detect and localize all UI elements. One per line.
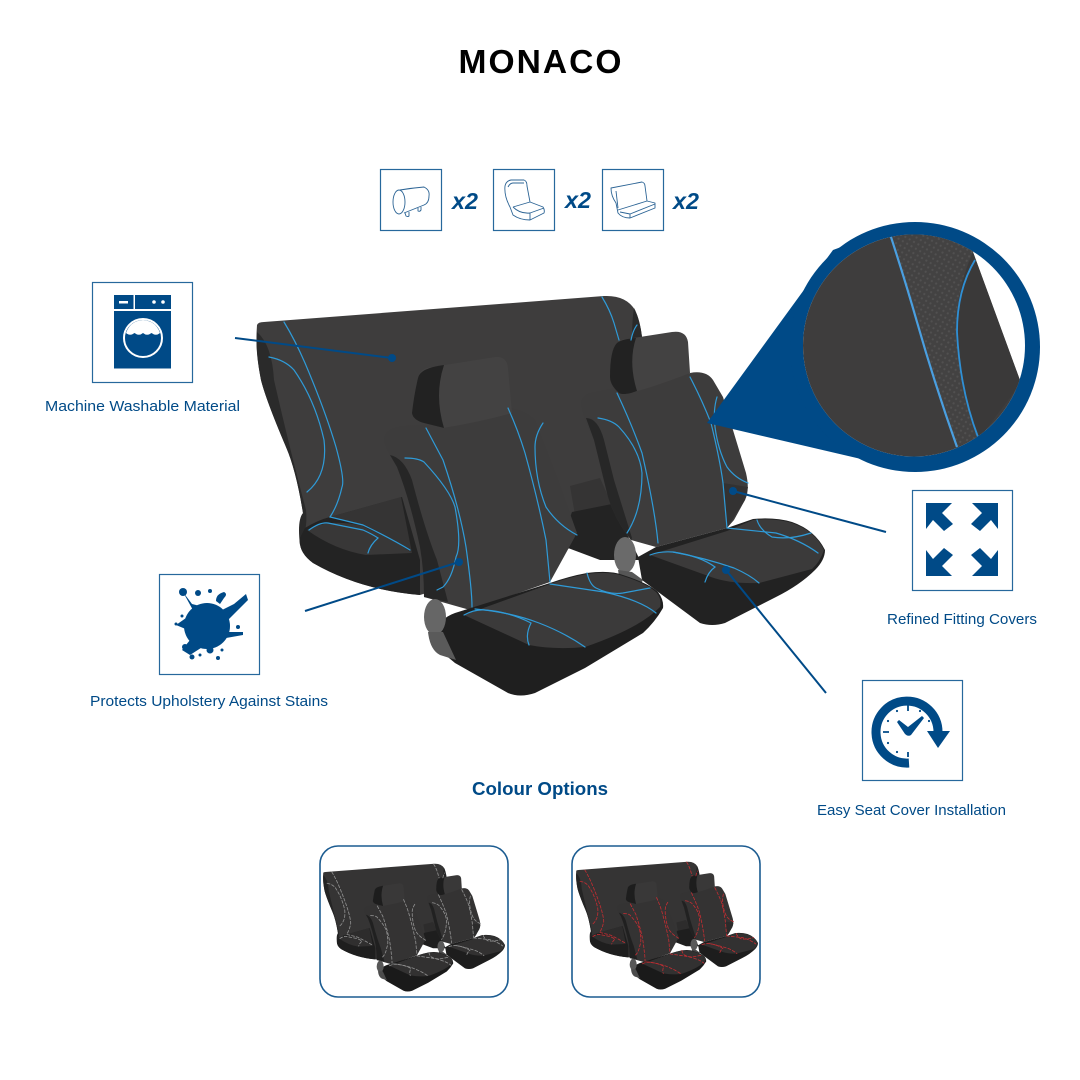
contents icons row <box>380 170 699 230</box>
text: x2: x2 <box>563 187 591 213</box>
label: refined fitting: Refined Fitting Covers <box>887 611 1037 628</box>
seat cover set photo <box>256 296 825 696</box>
callout line: easy installation <box>722 566 826 693</box>
heading: colour options: Colour Options <box>472 779 608 799</box>
icon: bench seat <box>602 170 664 230</box>
text: x2: x2 <box>671 188 699 214</box>
icon: stain splat <box>160 574 260 674</box>
title: MONACO <box>458 43 624 80</box>
callout line: protects upholstery <box>305 558 463 611</box>
label: protects upholstery: Protects Upholstery Against Stains <box>90 693 328 710</box>
callout line: refined fitting <box>729 487 886 532</box>
colour option: grey stitching <box>320 846 508 997</box>
colour option: red stitching <box>572 846 760 997</box>
icon: headrest <box>380 170 442 230</box>
icon: expanding arrows <box>912 490 1012 590</box>
label: easy installation: Easy Seat Cover Installation <box>817 802 1006 819</box>
label: machine washable: Machine Washable Material <box>45 398 240 415</box>
magnified fabric callout <box>707 222 1040 480</box>
icon: washing machine <box>92 282 192 382</box>
callout line: machine washable <box>235 338 396 362</box>
icon: clock with arrow <box>862 680 962 780</box>
text: x2: x2 <box>450 188 478 214</box>
icon: single seat <box>494 170 554 230</box>
